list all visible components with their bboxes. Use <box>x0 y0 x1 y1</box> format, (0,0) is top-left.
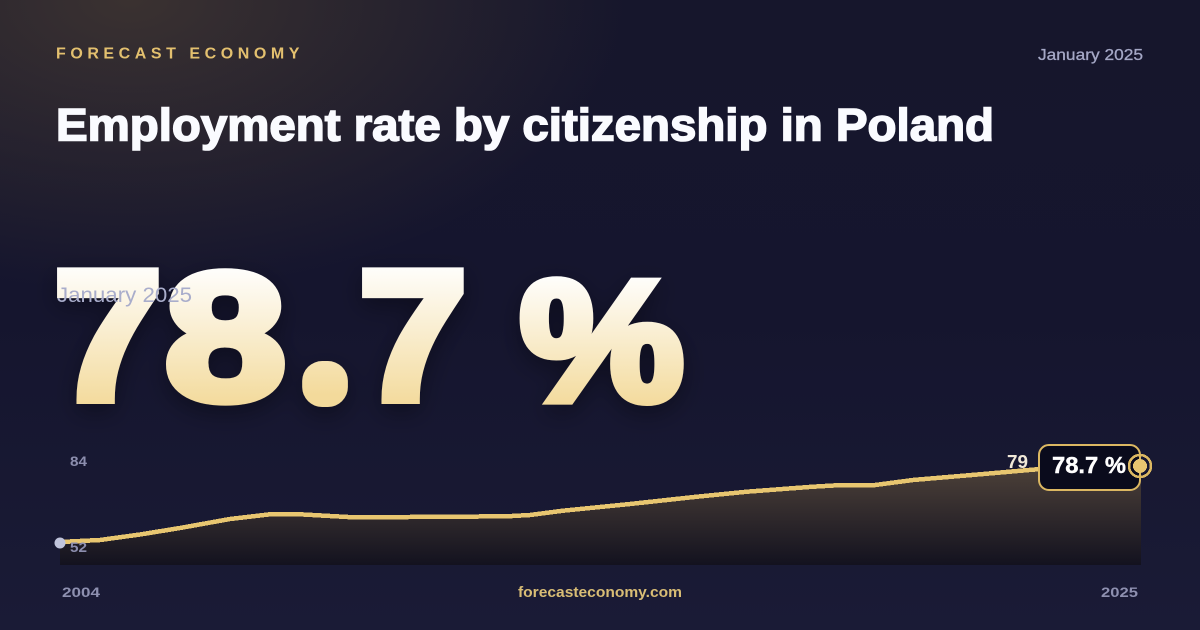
start marker <box>54 538 66 548</box>
big value: % <box>520 245 684 437</box>
callout badge: 78.7 % <box>1052 452 1126 478</box>
chart: area and line <box>60 466 1141 565</box>
website: forecasteconomy.com <box>518 584 682 601</box>
big value: . <box>320 352 331 396</box>
title: Employment rate by citizenship in Poland <box>56 100 994 150</box>
big value: 8 <box>165 236 286 438</box>
callout badge <box>1039 445 1140 490</box>
big value: 7 <box>359 234 467 439</box>
brand label: FORECAST ECONOMY <box>56 46 304 62</box>
rounded label 79: 79 <box>1007 452 1028 472</box>
big value <box>54 234 684 439</box>
big value: 7 <box>54 234 162 439</box>
end marker <box>1129 455 1151 477</box>
x axis end label: 2025 <box>1101 584 1138 600</box>
y axis min label: 52 <box>70 539 87 555</box>
y axis max label: 84 <box>70 453 87 469</box>
date overlay: January 2025 <box>57 284 192 307</box>
x axis start label: 2004 <box>62 584 100 600</box>
date top right: January 2025 <box>1038 47 1143 64</box>
